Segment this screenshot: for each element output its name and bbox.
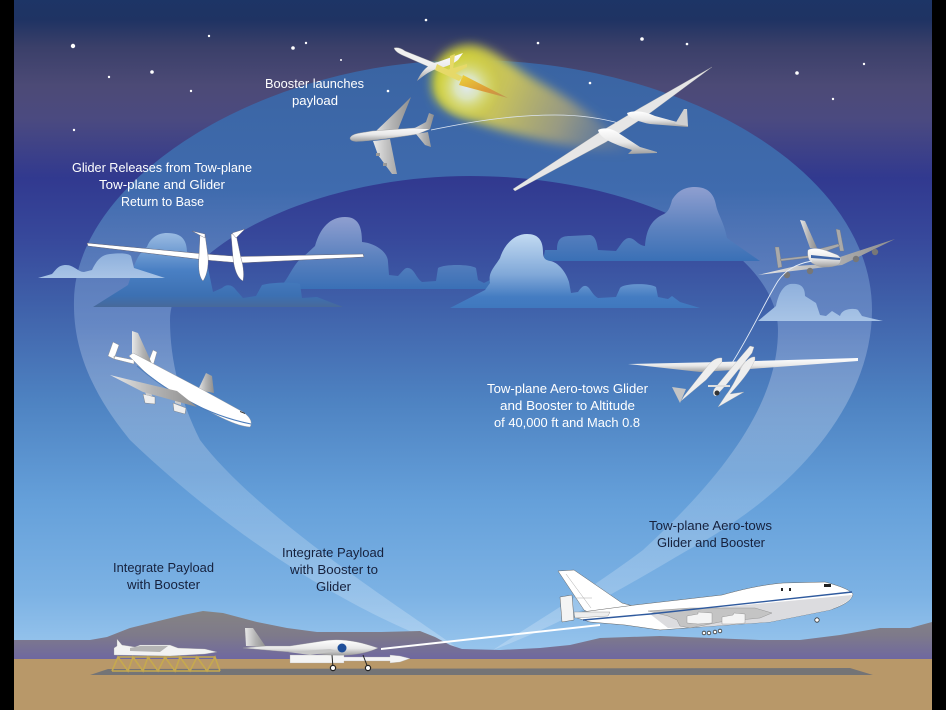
- icon: glider with booster mated: [243, 628, 410, 671]
- label: aero-tows: Tow-plane Aero-tows: [649, 518, 773, 533]
- booster: [290, 655, 410, 663]
- icon: glider top view: [513, 67, 712, 191]
- cloud: lower left: [93, 233, 343, 307]
- runway: [90, 668, 873, 675]
- fin detail: [566, 574, 592, 608]
- cloud: upper middle: [270, 217, 492, 289]
- cloud: center: [450, 234, 700, 308]
- booster body: [394, 48, 440, 70]
- tow-plane fuselage: [350, 126, 430, 142]
- flight path ring: [74, 60, 872, 650]
- cockpit and windows: [781, 584, 831, 591]
- tow-plane tail: [413, 113, 434, 147]
- glider boom right: [231, 234, 244, 281]
- clouds: [38, 187, 883, 321]
- glider fuselage lower: [598, 128, 657, 154]
- booster: [713, 346, 754, 396]
- label: aero-tows: Glider and Booster: [657, 535, 766, 550]
- booster wing: [417, 53, 463, 81]
- exhaust flame: [459, 75, 508, 98]
- booster on rack: [114, 639, 217, 656]
- glider wing: [628, 358, 858, 372]
- label: booster launches: Booster launches: [265, 76, 364, 91]
- icon: tow-plane top view: [350, 97, 434, 174]
- glider wing: [288, 649, 338, 655]
- engines: [687, 612, 745, 624]
- cloud: upper right: [543, 187, 760, 261]
- yellow-lit glider tail: [435, 54, 467, 81]
- tow line upper: [431, 115, 622, 130]
- main gear: [332, 655, 368, 668]
- wing root: [648, 608, 772, 628]
- fuselage left: [681, 358, 722, 401]
- cockpit: [240, 411, 245, 414]
- engines: [143, 394, 186, 414]
- stars: [71, 19, 865, 131]
- glider fin: [675, 109, 688, 126]
- wings: [758, 239, 895, 275]
- far engine fin: [198, 373, 214, 393]
- cloud: right small: [758, 284, 883, 321]
- fuselage stripe: [811, 255, 840, 260]
- rear engine pod: [108, 342, 157, 366]
- tail fin: [132, 331, 153, 366]
- pylons: [144, 388, 181, 405]
- label: glider release: Glider Releases from Tow-plane: [72, 160, 252, 175]
- glider wing: [87, 243, 364, 263]
- tail plane: [708, 385, 730, 387]
- glider fuselage: [243, 640, 378, 655]
- label: glider release: Return to Base: [121, 194, 204, 209]
- glider tail fin: [245, 628, 266, 647]
- icon: payload rack and booster: [112, 639, 220, 671]
- icon: glider and booster under tow: [628, 346, 858, 407]
- label: integrate payload with booster: with Booster: [126, 577, 201, 592]
- icon: 747 tow-plane taking off: [558, 570, 853, 635]
- mountains: [14, 611, 932, 659]
- glider tail fins: [192, 229, 245, 238]
- tail fin: [558, 570, 633, 613]
- fuselage: [129, 353, 251, 427]
- label: integrate payload with booster to glider: Glider: [316, 579, 352, 594]
- fuselage: [574, 582, 853, 630]
- glider wing: [513, 67, 712, 191]
- tow cable on ground: [381, 624, 600, 650]
- stabiliser pod: [560, 595, 574, 622]
- icon: tow-plane banking rear view: [758, 220, 895, 278]
- fuselage stripe: [137, 366, 251, 424]
- icon: left glider release view: [87, 229, 364, 281]
- label: aero-tow to altitude: of 40,000 ft and Mach 0.8: [494, 415, 640, 430]
- engines: [784, 249, 878, 278]
- glider fuselage upper: [627, 111, 688, 127]
- label: integrate payload with booster to glider: Integrate Payload: [282, 545, 384, 560]
- label: glider release: Tow-plane and Glider: [99, 177, 226, 192]
- ground: [14, 659, 932, 710]
- NASA logo: [338, 644, 346, 652]
- fuselage right: [718, 357, 755, 407]
- tow-plane wings: [373, 97, 411, 174]
- tow line lower: [732, 261, 812, 363]
- label: aero-tow to altitude: Tow-plane Aero-tows Glider: [487, 381, 649, 396]
- rocket exhaust glow: [432, 45, 630, 152]
- tail fin: [800, 220, 817, 248]
- landing gear: [702, 618, 819, 635]
- tail fin: [672, 387, 686, 403]
- stabiliser: [574, 612, 610, 618]
- label: payload: payload: [292, 93, 338, 108]
- blue stripe: [583, 592, 852, 620]
- label: integrate payload with booster: Integrate Payload: [113, 560, 214, 575]
- belly shade: [650, 595, 852, 628]
- stars over ring: [387, 82, 591, 92]
- fuselage: [808, 248, 841, 267]
- rack truss: [112, 657, 220, 671]
- label: integrate payload with booster to glider: with Booster to: [289, 562, 378, 577]
- label: aero-tow to altitude: and Booster to Altitude: [500, 398, 635, 413]
- cloud: far left: [38, 253, 165, 278]
- wing near: [110, 375, 197, 407]
- icon: descending tow-plane: [108, 331, 251, 427]
- glider boom left: [199, 234, 208, 281]
- icon: booster igniting with glider release: [394, 48, 508, 98]
- stabilisers: [775, 229, 844, 268]
